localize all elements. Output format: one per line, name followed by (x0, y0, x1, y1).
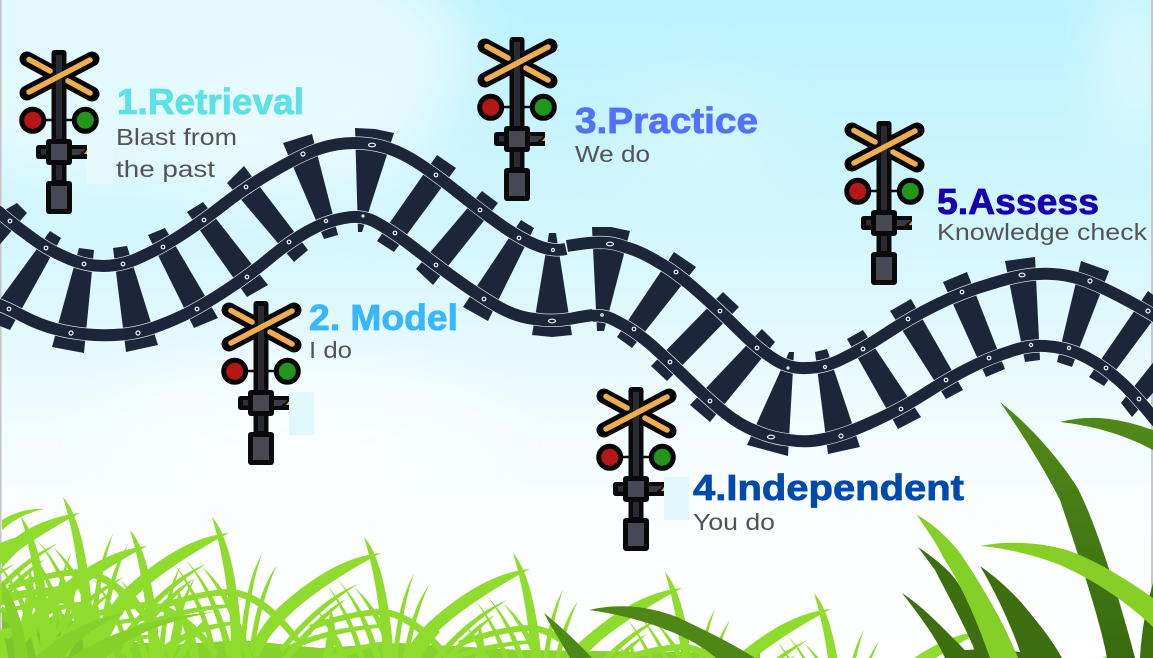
sleepers (0, 128, 1153, 456)
railway track (0, 128, 1153, 456)
step 3 label: 3.Practice (575, 100, 758, 141)
step 2 label (309, 297, 458, 363)
step 1 label: 1.Retrieval (117, 81, 304, 122)
step 5 label: 5.Assess (937, 181, 1099, 222)
step 3 label (575, 100, 758, 167)
step 5 label (937, 181, 1147, 245)
icon: crossing signal 1 (22, 50, 113, 214)
step 5 label: Knowledge check (937, 219, 1147, 245)
step 1 label: the past (116, 156, 216, 182)
grass: dark and bright foreground blades (544, 402, 1153, 658)
step 2 label: I do (309, 337, 352, 363)
rail bolts (7, 143, 1150, 439)
step 1 label: Blast from (116, 124, 237, 150)
icon: crossing signal 5 (847, 121, 937, 285)
icon: crossing signal 3 (480, 37, 554, 201)
icon: crossing signal 2 (224, 301, 314, 465)
step 2 label: 2. Model (309, 297, 458, 338)
grass: light background clumps (0, 478, 1153, 658)
icon: crossing signal 4 (599, 387, 689, 551)
rails (0, 143, 1153, 441)
step 4 label (693, 467, 964, 535)
step 1 label (116, 81, 304, 182)
step 3 label: We do (575, 141, 650, 167)
step 4 label: You do (693, 509, 775, 535)
step 4 label: 4.Independent (693, 467, 964, 508)
